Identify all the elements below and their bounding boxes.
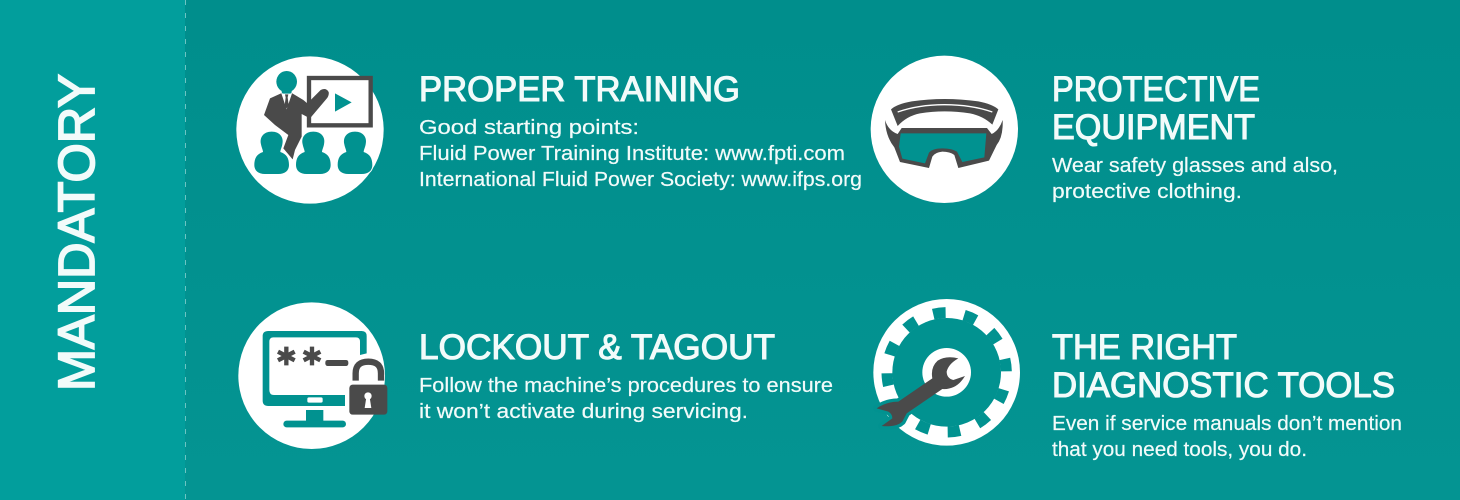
- heading: protective equipment: EQUIPMENT: [1052, 108, 1255, 147]
- text: proper training body: International Fluid Power Society: www.ifps.org: [419, 168, 862, 191]
- audience: [254, 132, 372, 174]
- sidebar heading: MANDATORY: MANDATORY: [48, 74, 105, 391]
- heading: lockout and tagout: LOCKOUT & TAGOUT: [419, 328, 775, 367]
- wrench: [877, 357, 965, 426]
- text: diagnostic tools body: [1052, 412, 1402, 461]
- text: protective equipment body: protective clothing.: [1052, 180, 1242, 203]
- text: proper training body: Fluid Power Training Institute: www.fpti.com: [419, 142, 845, 165]
- heading: protective equipment: PROTECTIVE: [1052, 70, 1260, 109]
- text: diagnostic tools body: that you need tools, you do.: [1052, 438, 1307, 461]
- text: lockout body: [419, 374, 833, 423]
- text: protective equipment body: [1052, 154, 1338, 203]
- heading: proper training: PROPER TRAINING: [419, 70, 740, 109]
- text: lockout body: it won’t activate during servicing.: [419, 400, 748, 423]
- gear: [875, 301, 1018, 444]
- text: proper training body: [419, 116, 862, 191]
- text: diagnostic tools body: Even if service manuals don’t mention: [1052, 412, 1402, 435]
- panel: sidebar: [0, 0, 186, 500]
- frame and lens: [885, 120, 1003, 168]
- heading: right diagnostic tools: THE RIGHT: [1052, 328, 1237, 367]
- text: protective equipment body: Wear safety glasses and also,: [1052, 154, 1338, 177]
- text: proper training body: Good starting points:: [419, 116, 639, 139]
- heading: right diagnostic tools: [1052, 328, 1395, 405]
- text: lockout body: Follow the machine’s procedures to ensure: [419, 374, 833, 397]
- heading: protective equipment: [1052, 70, 1260, 147]
- board: [309, 78, 371, 125]
- heading: right diagnostic tools: DIAGNOSTIC TOOLS: [1052, 366, 1395, 405]
- icon: computer with padlock: [238, 302, 387, 449]
- presenter: [264, 71, 329, 159]
- password characters: [278, 347, 348, 366]
- padlock: [349, 362, 387, 415]
- icon: gear and wrench: [873, 299, 1020, 446]
- monitor: [263, 331, 367, 427]
- icon: safety goggles: [871, 56, 1018, 203]
- strap: [891, 99, 998, 126]
- icon: presenter training: [236, 56, 384, 204]
